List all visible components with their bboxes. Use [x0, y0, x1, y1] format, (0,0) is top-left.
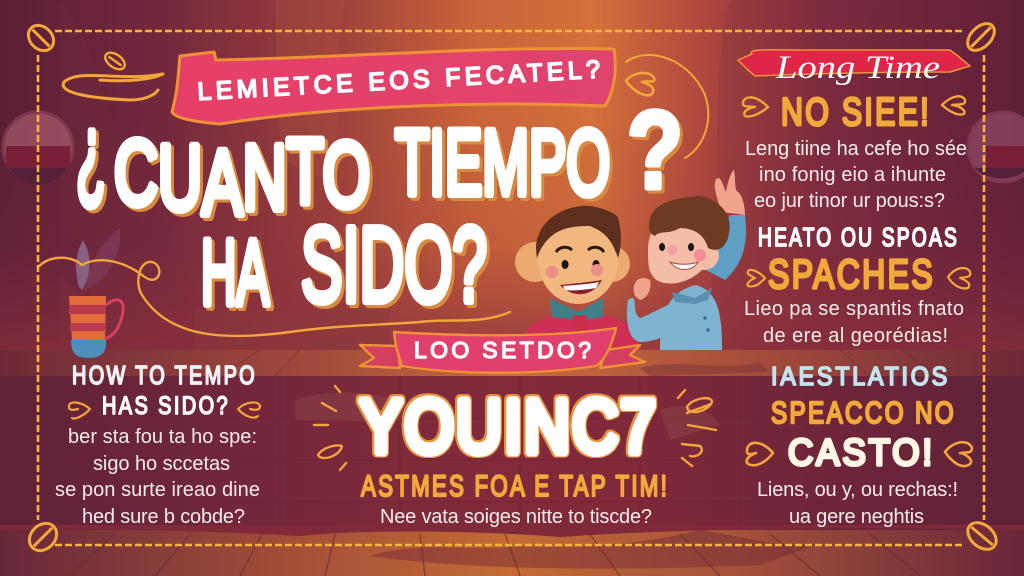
text block: left paragraph: se pon surte ireao dine	[55, 479, 260, 501]
icon: top-right corner seed	[963, 19, 999, 55]
text block: intro paragraph	[745, 138, 967, 212]
decoration: curved arrow line and heart by question mark	[626, 55, 708, 158]
subheading: iaestlatios: IAESTLATIOS	[771, 361, 950, 391]
decoration: left round window	[3, 112, 73, 184]
title: main Spanish question: CUANTO	[114, 121, 370, 234]
title: main Spanish question: ?	[627, 89, 683, 212]
banner: long time red ribbon: Long Time	[775, 50, 940, 86]
text block: spaches paragraph	[744, 298, 964, 347]
title: main Spanish question: TIEMPO	[395, 112, 610, 214]
text block: left paragraph	[55, 426, 260, 528]
heading: casto: CASTO!	[788, 432, 935, 473]
text block: intro paragraph: Leng tiine ha cefe ho sée	[745, 138, 967, 160]
decoration: right round window	[968, 112, 1024, 182]
text block: centre caption: Nee vata soiges nitte to tiscde?	[380, 506, 652, 528]
banner: top pink ribbon: LEMIETCE EOS FECATEL?	[197, 56, 601, 106]
panel: right column	[738, 50, 972, 528]
heading: casto	[747, 432, 972, 473]
text block: closing paragraph right	[757, 479, 958, 528]
text block: intro paragraph: eo jur tinor ur pous:s?	[754, 190, 945, 212]
banner: top pink ribbon	[172, 49, 615, 124]
heading: speacco no: SPEACCO NO	[771, 395, 956, 430]
title: main Spanish question	[76, 89, 683, 324]
text block: left paragraph: hed sure b cobde?	[82, 506, 245, 528]
text block: spaches paragraph: de ere al georédias!	[763, 325, 948, 347]
banner: long time red ribbon	[738, 50, 970, 86]
text block: closing paragraph right: ua gere neghtis	[789, 506, 924, 528]
panel: left column	[55, 360, 260, 528]
heading: youinc7: YOUINC7	[360, 385, 658, 468]
banner: centre pink ribbon: LOO SETDO?	[414, 337, 591, 363]
heading: has sido: HAS SIDO?	[102, 392, 230, 420]
icon: seed and swash beside ribbon	[63, 49, 163, 100]
icon: bottom-left corner seed	[24, 518, 62, 556]
icon: bottom-right corner seed	[963, 517, 1001, 555]
background: wooden floor	[0, 525, 1024, 576]
decoration: plant leaves	[53, 226, 120, 290]
background: wooden shelf strip	[0, 350, 1024, 376]
title: main Spanish question: ¿	[76, 90, 106, 211]
text block: left paragraph: sigo ho sccetas	[93, 453, 230, 475]
text block: closing paragraph right: Liens, ou y, ou rechas:!	[757, 479, 958, 501]
text block: intro paragraph: ino fonig eio a ihunte	[759, 164, 946, 186]
title: main Spanish question: HA	[201, 222, 269, 324]
icon: striped mug	[69, 288, 123, 358]
character: smiling boy in red	[515, 206, 640, 350]
panel: bottom centre	[314, 385, 716, 528]
banner: centre pink ribbon	[360, 328, 645, 373]
background: dark wall panel	[0, 376, 1024, 530]
text block: left paragraph: ber sta fou ta ho spe:	[68, 426, 257, 448]
heading: no siee: NO SIEE!	[781, 91, 931, 134]
subheading: how to tempo: HOW TO TEMPO	[72, 360, 257, 390]
subheading: heato ou spoas: HEATO OU SPOAS	[758, 222, 959, 252]
heading: spaches: SPACHES	[768, 251, 935, 297]
subheading: astmes foa e tap tim: ASTMES FOA E TAP TIM!	[361, 470, 669, 503]
title: main Spanish question: SIDO?	[301, 206, 487, 324]
character: waving boy in blue	[627, 170, 746, 350]
text block: spaches paragraph: Lieo pa se spantis fnato	[744, 298, 964, 320]
illustration: two cheerful boys	[515, 170, 746, 350]
icon: top-left corner seed	[23, 20, 59, 56]
decoration: orange swirl line	[38, 258, 510, 336]
